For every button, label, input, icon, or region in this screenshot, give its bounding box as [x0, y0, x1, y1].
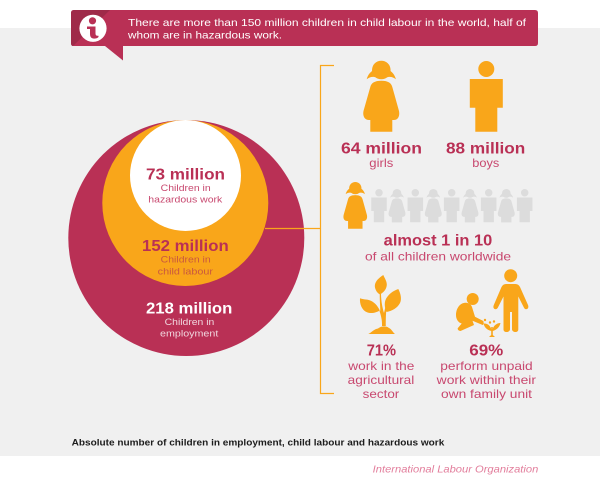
label: 152 million: child labour: [158, 266, 213, 276]
label: 73 million: hazardous work: [148, 195, 223, 205]
stat: agricultural sector: sector: [363, 387, 399, 401]
circle: child labour: [102, 120, 268, 286]
adult: [493, 269, 528, 332]
label: 218 million: [146, 301, 232, 339]
label: 152 million: 152 million: [142, 238, 229, 255]
seedling: [484, 319, 500, 337]
label: 73 million: 73 million: [146, 166, 225, 183]
icon: boy: [470, 61, 503, 132]
icon: information: [79, 15, 107, 42]
icon: girl: [363, 61, 399, 132]
label: 218 million: 218 million: [146, 301, 232, 318]
source credit: International Labour Organization: [373, 463, 538, 475]
stat: unpaid family work: own family unit: [441, 387, 533, 401]
label: 218 million: Children in: [165, 317, 214, 327]
stat: boys: boys: [472, 156, 499, 170]
stat: girls: 64 million: [341, 140, 422, 157]
stat: agricultural sector: [347, 343, 418, 401]
label: 73 million: Children in: [161, 183, 211, 193]
pictogram row: 1 in 10: [343, 182, 532, 229]
banner callout: [71, 10, 538, 60]
label: 152 million: Children in: [161, 254, 211, 264]
label: 218 million: employment: [160, 329, 219, 339]
connector bracket: [265, 66, 334, 394]
banner corner shade: [71, 10, 110, 46]
stat: unpaid family work: perform unpaid: [440, 359, 533, 373]
circle: children in employment: [68, 120, 304, 356]
stat: boys: [446, 61, 525, 170]
banner text: whom are in hazardous work.: [127, 30, 282, 41]
icon: plant: [360, 275, 401, 334]
stat: unpaid family work: [436, 343, 539, 401]
stat: agricultural sector: agricultural: [348, 373, 414, 387]
stat: unpaid family work: work within their: [436, 373, 536, 387]
nested circle chart: [68, 120, 304, 356]
icon: child and adult with seedling: [456, 269, 528, 337]
label: 73 million: [146, 166, 225, 205]
stat: boys: 88 million: [446, 140, 525, 157]
stat: almost 1 in 10: of all children worldwide: [365, 250, 511, 264]
label: 152 million: [142, 238, 229, 276]
stat: unpaid family work: 69%: [469, 343, 504, 360]
stat: almost 1 in 10: [365, 233, 511, 264]
icons: grey children: [371, 189, 532, 222]
stat: girls: [341, 61, 422, 170]
stat: agricultural sector: work in the: [347, 359, 415, 373]
caption: Absolute number of children in employment, child labour and hazardous work: [72, 437, 445, 448]
stat: agricultural sector: 71%: [367, 343, 396, 360]
circle: hazardous work: [130, 120, 241, 231]
icon: highlighted girl: [343, 182, 367, 229]
child: [456, 293, 484, 331]
stat: girls: girls: [369, 156, 393, 170]
stat: almost 1 in 10: almost 1 in 10: [384, 233, 492, 250]
banner text: There are more than 150 million children in child labour in the world, half of: [128, 18, 526, 29]
